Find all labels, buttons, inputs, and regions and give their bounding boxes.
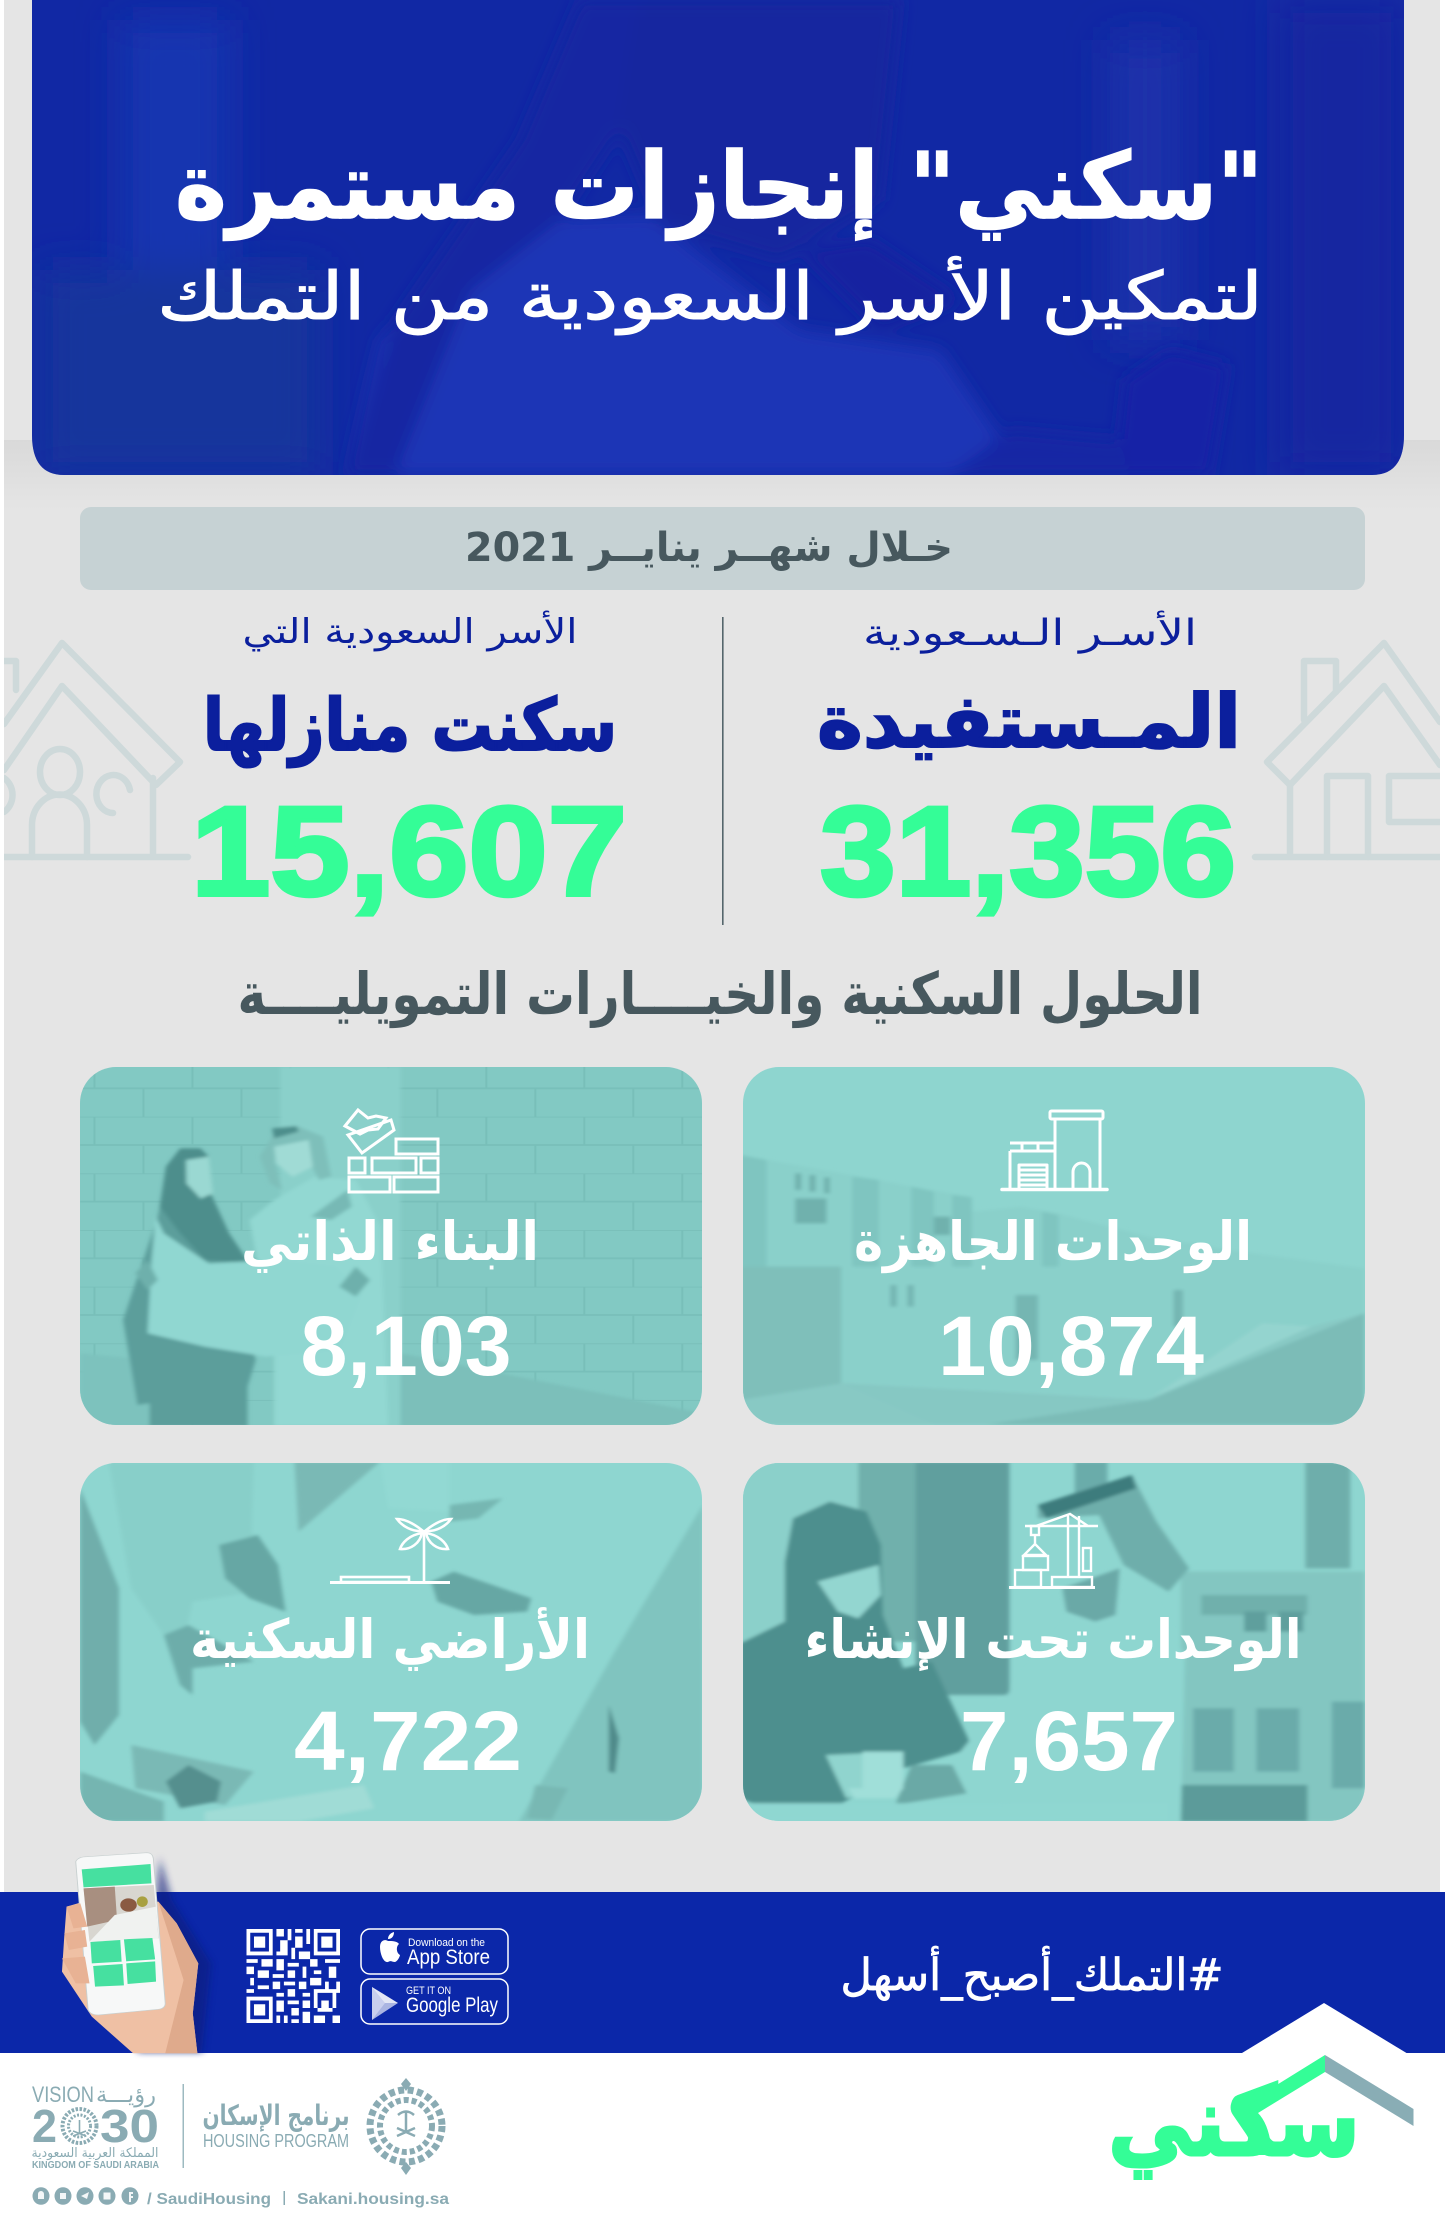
- QR code: [246, 1929, 340, 2023]
- numeral 2: 2: [32, 2100, 57, 2152]
- badge text: Google Play: [406, 1994, 498, 2017]
- kingdom arabic: المملكة العربية السعودية: [32, 2146, 158, 2161]
- stat number: 15,607: [191, 780, 627, 922]
- card number: 7,657: [960, 1694, 1178, 1788]
- white roof: [1242, 2003, 1406, 2053]
- footer band: [0, 1892, 1445, 2053]
- kingdom english: KINGDOM OF SAUDI ARABIA: [32, 2160, 159, 2171]
- icon: play triangle: [372, 1987, 398, 2020]
- badge text: Download on the: [408, 1937, 485, 1949]
- logo word: سكني: [1108, 2066, 1360, 2179]
- card: ready units: [740, 1067, 1365, 1425]
- program english: HOUSING PROGRAM: [203, 2131, 349, 2151]
- Vision 2030 logo: [32, 2082, 159, 2171]
- App Store badge: [361, 1929, 508, 1974]
- program arabic: برنامج الإسكان: [202, 2099, 350, 2132]
- card: units under construction: [740, 1462, 1365, 1822]
- card title: الأراضي السكنية: [190, 1607, 590, 1671]
- section heading: الحلول السكنية والخيــــارات التمويليــــة: [238, 960, 1202, 1029]
- icon: apple: [380, 1932, 400, 1962]
- stat: beneficiary families: [817, 610, 1241, 922]
- card title: الوحدات الجاهزة: [854, 1210, 1252, 1273]
- card number: 10,874: [938, 1299, 1204, 1393]
- hero title line 1: "سكني" إنجازات مستمرة: [175, 133, 1263, 241]
- icon: crane: [1009, 1514, 1098, 1588]
- icon: house: [1255, 643, 1440, 857]
- badge text: App Store: [407, 1946, 490, 1969]
- Google Play badge: [361, 1979, 508, 2024]
- card number: 8,103: [300, 1299, 512, 1393]
- social icons: [32, 2187, 138, 2205]
- Housing Program logo: [202, 2078, 442, 2175]
- vision arabic: رؤيـــة: [96, 2083, 156, 2108]
- badge text: GET IT ON: [406, 1985, 451, 1997]
- icon: bricks and trowel: [345, 1110, 438, 1192]
- stat heading: سكنت منازلها: [203, 683, 617, 768]
- roof line grey: [1325, 2055, 1414, 2126]
- stat heading: المـستفيدة: [817, 679, 1241, 765]
- roof line green: [1238, 2055, 1325, 2155]
- icon: buildings: [1002, 1111, 1107, 1190]
- stat label: الأسـر الـسـعودية: [863, 610, 1197, 654]
- date bar: [80, 507, 1365, 590]
- hero banner: [32, 0, 1404, 475]
- card title: البناء الذاتي: [241, 1210, 539, 1273]
- icon: house with family: [4, 643, 188, 857]
- stat number: 31,356: [820, 780, 1236, 922]
- icon: palm and land plot: [330, 1519, 451, 1582]
- emblem: [370, 2078, 442, 2175]
- card: self construction: [80, 1067, 703, 1427]
- card title: الوحدات تحت الإنشاء: [804, 1608, 1302, 1671]
- hero title line 2: لتمكين الأسر السعودية من التملك: [157, 255, 1263, 335]
- logo: Sakani: [1108, 2003, 1414, 2179]
- emblem: [62, 2109, 96, 2143]
- stat label: الأسر السعودية التي: [242, 610, 578, 652]
- card: residential land: [80, 1462, 703, 1822]
- stat: families moved in: [191, 610, 627, 922]
- phone in hand: [62, 1853, 211, 2053]
- date text: خـلال شهــر ينايــر 2021: [465, 525, 953, 571]
- social handle: / SaudiHousing: [147, 2191, 271, 2208]
- website: Sakani.housing.sa: [297, 2191, 449, 2208]
- card number: 4,722: [294, 1694, 522, 1788]
- numeral 30: 30: [100, 2100, 159, 2152]
- hashtag: #التملك_أصبح_أسهل: [840, 1946, 1224, 2001]
- vision label: VISION: [32, 2082, 94, 2107]
